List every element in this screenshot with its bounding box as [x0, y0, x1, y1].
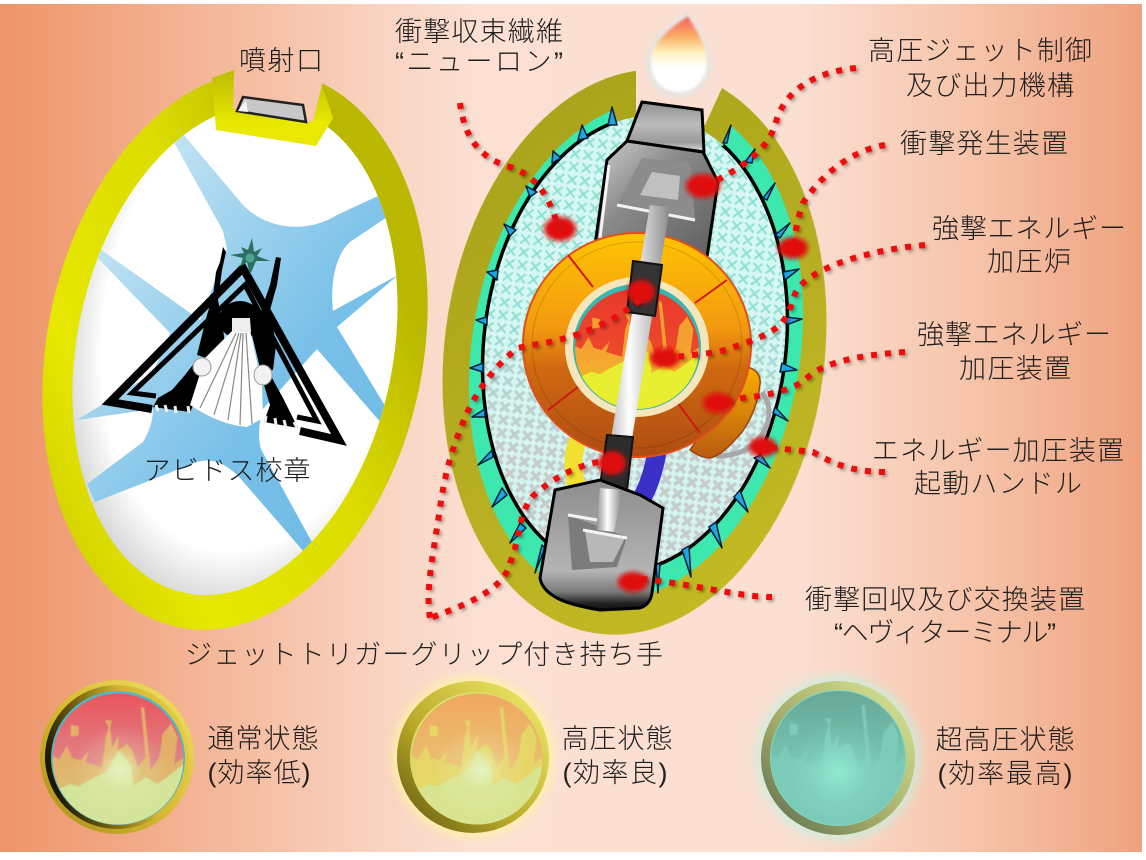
- caption: ultra high pressure state: (効率最高): [938, 759, 1072, 789]
- label: energy pressure furnace: 強撃エネルギー: [932, 214, 1126, 244]
- blue cable: [640, 452, 657, 502]
- grey hatched lower interior: [484, 330, 786, 562]
- ignition handle: [690, 367, 769, 458]
- label: high pressure jet control: [868, 36, 1092, 101]
- emblem: triangle and creature: [110, 247, 339, 440]
- label: shock generator: 衝撃発生装置: [900, 129, 1068, 159]
- caption: high pressure state: (効率良): [562, 758, 668, 788]
- caption: ultra high pressure state: [936, 725, 1074, 789]
- caption: high pressure state: [562, 724, 672, 788]
- label: school crest: アビドス校章: [144, 456, 310, 486]
- label: energy pressure device: 強撃エネルギー: [917, 320, 1111, 350]
- label: energy pressure furnace: 加圧炉: [987, 247, 1071, 277]
- red dotted leader lines: [429, 68, 925, 618]
- panel: school emblem side: [42, 70, 428, 630]
- yellow ring of the egg-shaped casing: [42, 81, 428, 630]
- label: high pressure jet control: 高圧ジェット制御: [868, 36, 1092, 66]
- label: shock focusing fibre: 衝撃収束繊維: [395, 17, 563, 47]
- label: energy pressure furnace: [932, 214, 1126, 277]
- label: heavy terminal: [805, 585, 1085, 648]
- state: ultra high pressure: [755, 675, 1074, 841]
- caption: normal state: 通常状態: [208, 724, 318, 754]
- black lining: [480, 123, 790, 566]
- label: grip: ジェットトリガーグリップ付き持ち手: [185, 640, 663, 670]
- icon: jet flame: [645, 12, 712, 98]
- hatched interior: [457, 98, 813, 590]
- label: shock focusing fibre: “ニューロン”: [395, 47, 563, 77]
- label: starter handle: 起動ハンドル: [914, 469, 1082, 499]
- central metal rod: [596, 205, 670, 530]
- gem: normal state: [40, 680, 194, 834]
- label: heavy terminal: “ヘヴィターミナル”: [834, 618, 1056, 648]
- state: normal: [40, 680, 318, 834]
- label: starter handle: [872, 436, 1124, 499]
- caption: normal state: (効率低): [208, 758, 310, 788]
- label: shock focusing fibre: [395, 17, 563, 77]
- burning window: [565, 277, 709, 417]
- gem: high pressure state: [392, 676, 554, 838]
- lower dark coupling: [600, 435, 633, 490]
- state: high pressure: [392, 676, 672, 838]
- emblem: star gem: [230, 238, 270, 275]
- yellow cable: [574, 440, 578, 492]
- label: nozzle: 噴射口: [239, 46, 323, 76]
- label: high pressure jet control: 及び出力機構: [906, 71, 1074, 101]
- gem: ultra high pressure state: [755, 675, 921, 841]
- panel: cutaway device: [442, 70, 827, 635]
- label: starter handle: エネルギー加圧装置: [872, 436, 1124, 466]
- orange pressure disc: [523, 233, 751, 457]
- olive textured shell: [442, 70, 827, 635]
- label: energy pressure device: 加圧装置: [959, 354, 1071, 384]
- red callout markers: [544, 174, 808, 592]
- lower metal housing: [540, 480, 663, 610]
- nozzle vent: [237, 97, 306, 122]
- upper dark coupling: [627, 261, 662, 316]
- collar of the nozzle: [212, 70, 333, 146]
- label: heavy terminal: 衝撃回収及び交換装置: [805, 585, 1085, 615]
- label: energy pressure device: [917, 320, 1111, 384]
- blue star shape: [77, 128, 398, 553]
- upper metal housing: [595, 102, 718, 257]
- teal ring: [468, 111, 804, 592]
- blue spikes on the ring: [470, 107, 802, 593]
- caption: normal state: [208, 724, 318, 788]
- caption: ultra high pressure state: 超高圧状態: [936, 725, 1074, 755]
- caption: high pressure state: 高圧状態: [562, 724, 672, 754]
